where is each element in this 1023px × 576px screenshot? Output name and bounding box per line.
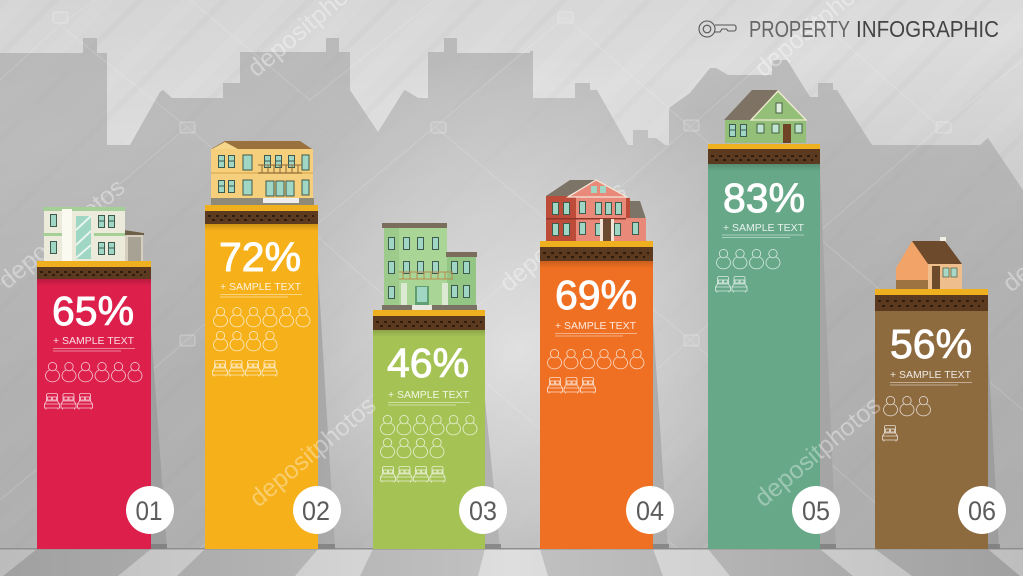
watermarks (0, 0, 1023, 298)
number 04 (626, 486, 674, 534)
number 02 (293, 486, 341, 534)
people icons (214, 307, 310, 351)
house 4 (546, 180, 646, 241)
floor (0, 548, 1023, 576)
people icons (380, 415, 477, 458)
value: 72% (219, 234, 301, 280)
value: 83% (723, 175, 805, 221)
bed icons (716, 276, 747, 292)
sample text: + SAMPLE TEXT (723, 222, 805, 234)
number 03 (459, 486, 507, 534)
number 06 (958, 486, 1006, 534)
sample text: + SAMPLE TEXT (555, 320, 637, 332)
watermarks over lower bars: depositphotos (244, 391, 381, 513)
bar 02 (205, 141, 318, 549)
title (699, 16, 999, 42)
number 05 (792, 486, 840, 534)
people icons (46, 362, 142, 382)
sample text: + SAMPLE TEXT (388, 389, 470, 401)
value: 46% (387, 340, 469, 386)
value: 65% (52, 288, 134, 334)
people icons (716, 249, 780, 269)
title: INFOGRAPHIC (856, 16, 999, 42)
bed icons (44, 394, 92, 410)
watermarks: depositphotos (494, 176, 631, 298)
bar 05 (708, 90, 820, 549)
sample text: + SAMPLE TEXT (890, 369, 972, 381)
watermarks over lower bars: depositphotos (749, 391, 886, 513)
bar 03 (373, 223, 485, 549)
number 02: 02 (302, 496, 330, 526)
people icons (884, 396, 930, 416)
icon: key (699, 21, 736, 37)
bar side shadows (151, 170, 999, 549)
bed icons (548, 378, 596, 394)
bed icons (380, 466, 445, 482)
bar 06 (875, 237, 988, 549)
bar 01 (37, 207, 151, 549)
number 01 (126, 486, 174, 534)
number 04: 04 (636, 496, 664, 526)
sample text: + SAMPLE TEXT (53, 335, 135, 347)
house 5 (724, 90, 806, 143)
bar 04 (540, 180, 653, 549)
house 2 (211, 141, 314, 205)
number 06: 06 (968, 496, 996, 526)
house 1 (43, 207, 144, 261)
bed icons (882, 426, 898, 442)
people icons (548, 349, 644, 369)
sample text: + SAMPLE TEXT (220, 281, 302, 293)
number 03: 03 (469, 496, 497, 526)
title: PROPERTY (749, 16, 850, 42)
number 01: 01 (136, 496, 162, 526)
value: 56% (890, 321, 972, 367)
watermarks over lower bars (244, 391, 886, 513)
house 6 (896, 237, 962, 289)
number 05: 05 (802, 496, 830, 526)
value: 69% (555, 272, 637, 318)
bed icons (212, 360, 277, 376)
house 3 (382, 223, 477, 310)
